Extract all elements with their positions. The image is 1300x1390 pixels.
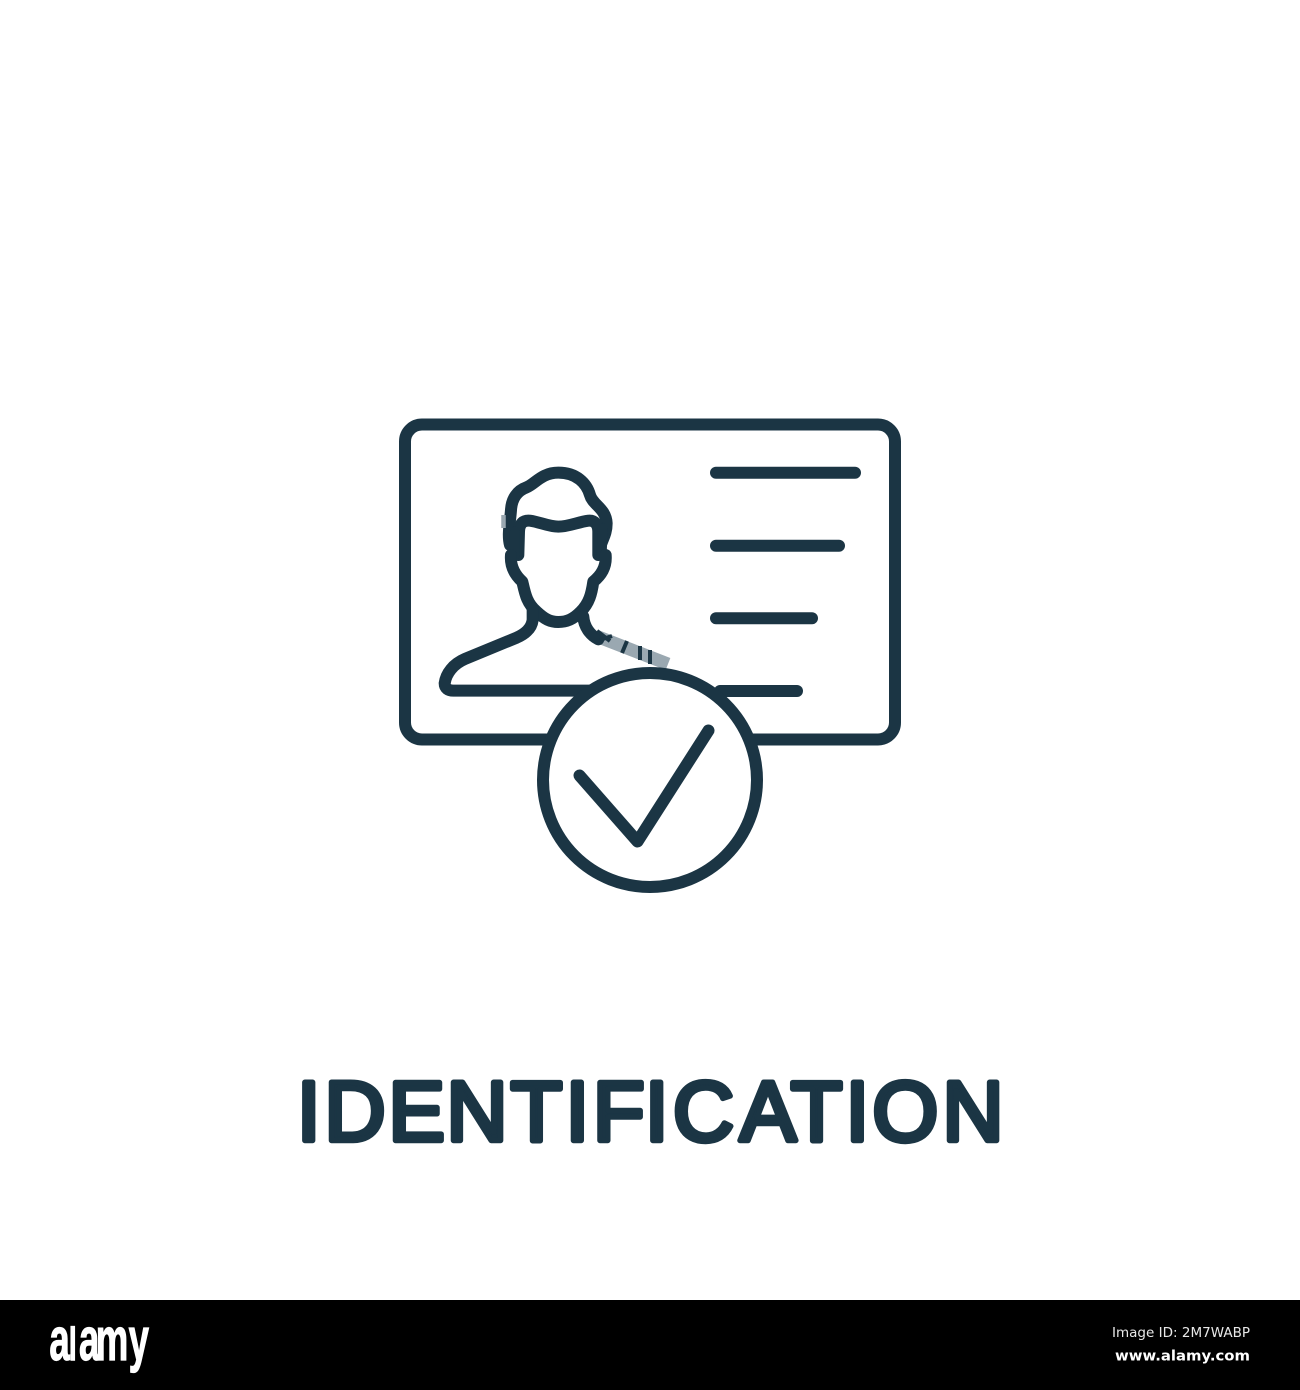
card outline bbox=[405, 424, 895, 740]
title: IDENTIFICATION bbox=[297, 1064, 1004, 1158]
text lines on card bbox=[716, 473, 855, 691]
left shoulder and base line bbox=[445, 608, 590, 691]
footer bar bbox=[0, 1300, 1300, 1390]
website: www.alamy.com bbox=[1115, 1348, 1250, 1364]
footer logo: l bbox=[69, 1320, 77, 1371]
footer logo: y bbox=[129, 1306, 149, 1373]
icon: identification card with verified person bbox=[405, 424, 895, 887]
footer logo: m bbox=[96, 1306, 128, 1373]
hair bbox=[509, 473, 607, 548]
watermark glitch on hair bbox=[501, 515, 506, 528]
check badge bbox=[543, 673, 757, 887]
watermark glitch on right shoulder bbox=[596, 636, 668, 664]
hairline and sideburns bbox=[518, 521, 598, 555]
sideburn thickening bbox=[515, 528, 603, 555]
person portrait bbox=[445, 473, 607, 691]
image id: Image ID: 2M7WABP bbox=[1112, 1325, 1250, 1341]
right neck and shoulder bbox=[583, 617, 598, 639]
check mark bbox=[580, 730, 708, 842]
footer logo: a bbox=[79, 1306, 100, 1373]
footer logo: a bbox=[49, 1306, 70, 1373]
watermark glitch dark marks bbox=[597, 631, 650, 664]
face contour bbox=[511, 555, 606, 622]
